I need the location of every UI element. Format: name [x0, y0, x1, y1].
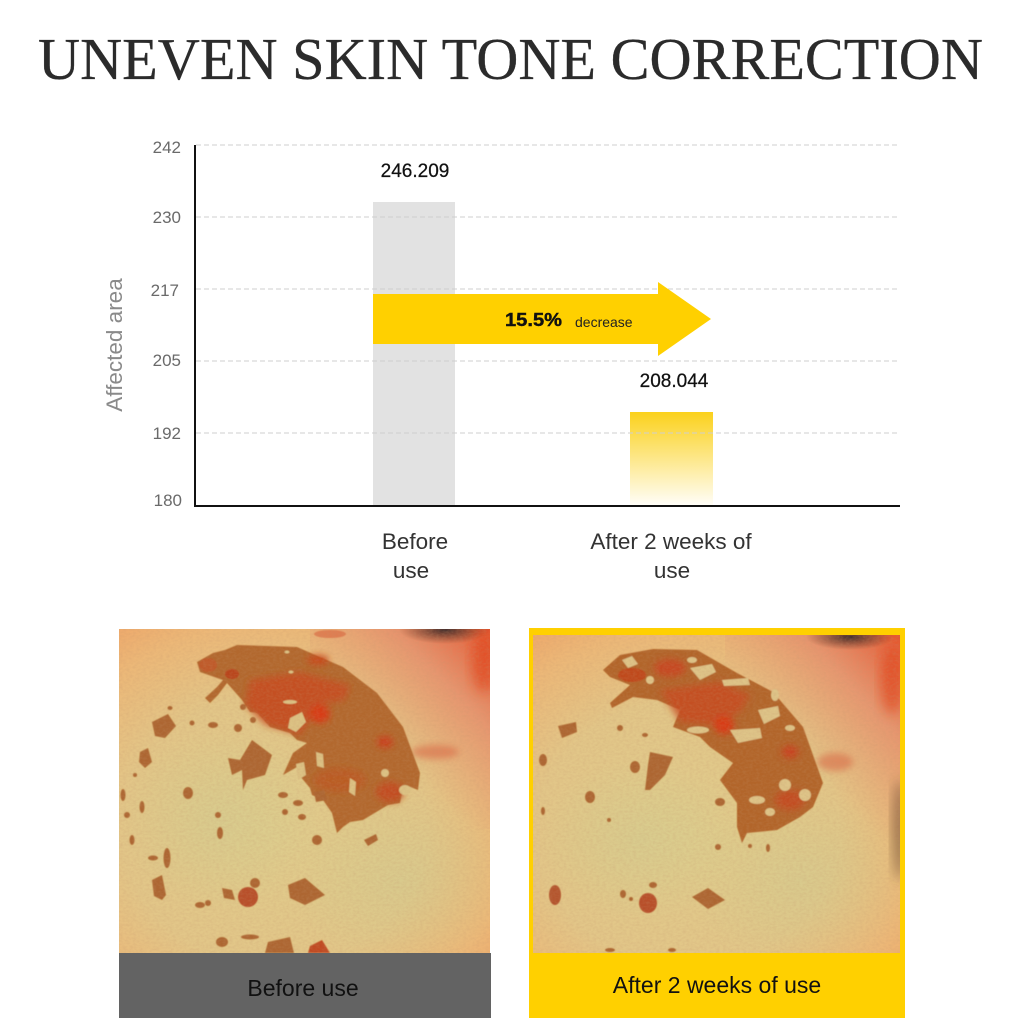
- arrow percentage: 15.5%: [505, 310, 562, 330]
- value: before: 246.209: [381, 161, 449, 182]
- title: UNEVEN SKIN TONE CORRECTION: [38, 26, 983, 92]
- skin photo before: [119, 629, 490, 953]
- y-axis ticks: 242: [153, 138, 181, 157]
- caption: before use: Before use: [247, 975, 359, 1001]
- bar: after 2 weeks: [630, 412, 713, 506]
- arrow caption: decrease: [575, 314, 633, 330]
- value: after: 208.044: [640, 371, 709, 392]
- y-axis ticks: 230: [153, 208, 181, 227]
- y-axis ticks: 192: [153, 424, 181, 443]
- caption: after 2 weeks of use: After 2 weeks of use: [613, 972, 821, 998]
- arrow: decrease: [373, 282, 711, 356]
- category label: after: use: [654, 558, 690, 583]
- skin photo after: [533, 635, 900, 953]
- y-axis ticks: 205: [153, 351, 181, 370]
- category label: after: After 2 weeks of: [590, 529, 752, 554]
- axes: [195, 145, 900, 506]
- y-axis label: Affected area: [102, 278, 127, 412]
- bar: before use: [373, 202, 455, 506]
- y-axis ticks: 180: [154, 491, 182, 510]
- category label: before: Before: [382, 529, 448, 554]
- category label: before: use: [393, 558, 429, 583]
- y-axis ticks: [151, 138, 182, 510]
- bar chart: [102, 138, 900, 583]
- caption bar: before: [119, 953, 491, 1018]
- yellow frame: [529, 628, 905, 1018]
- y-axis ticks: 217: [151, 281, 179, 300]
- panel: before photo: [119, 616, 510, 1018]
- panel: after photo: [529, 624, 910, 1018]
